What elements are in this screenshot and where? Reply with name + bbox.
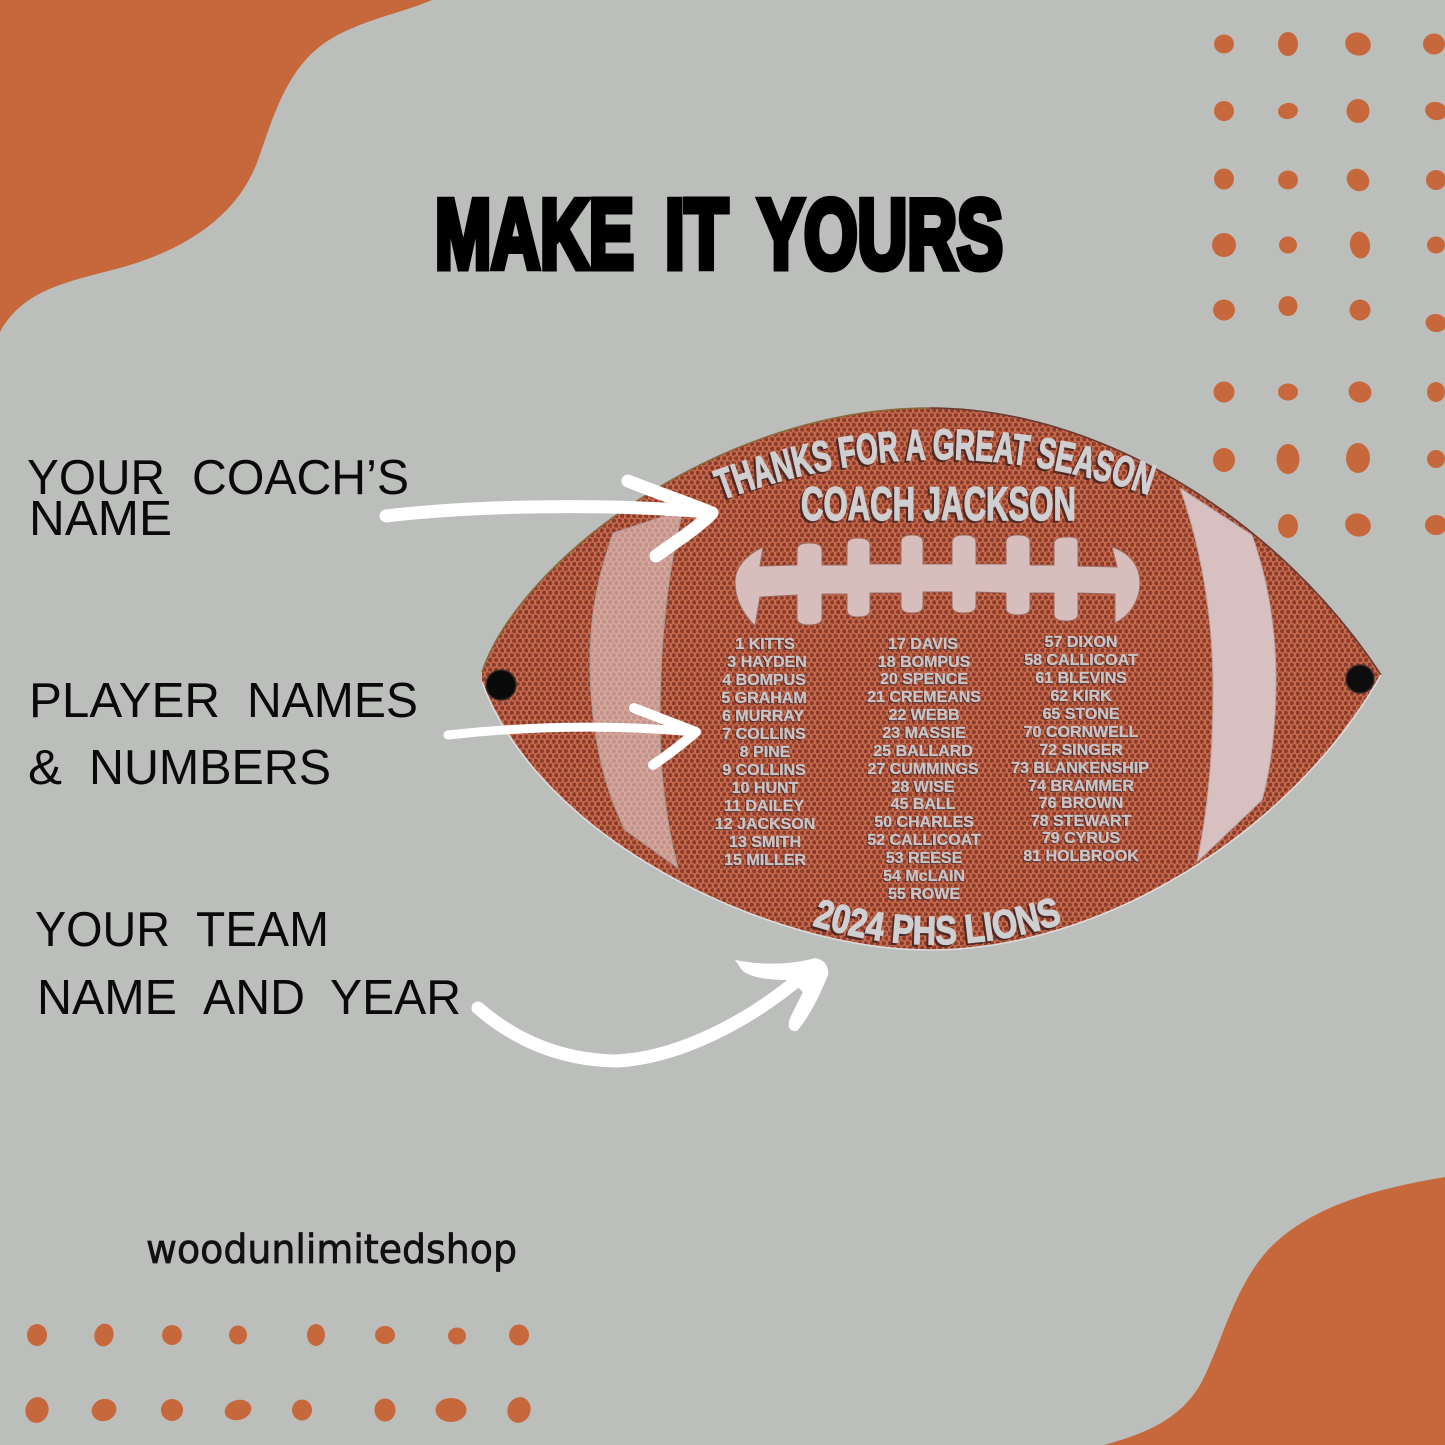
right stripe — [1180, 488, 1276, 862]
player list: column 3: 79 CYRUS — [1042, 830, 1120, 847]
label: your coach's name: NAME — [29, 492, 172, 546]
arrow: coach's name — [386, 481, 712, 556]
decorative dots: top right — [1212, 29, 1445, 540]
player list: column 2: 21 CREMEANS — [867, 689, 981, 706]
player list: column 1: 8 PINE — [740, 744, 791, 761]
player list: column 2 — [867, 636, 981, 903]
decorative dots: bottom left — [23, 1321, 534, 1426]
player list: column 2: 17 DAVIS — [888, 636, 958, 653]
team and year: 2024 PHS LIONS — [810, 898, 1060, 948]
player list: column 3: 62 KIRK — [1050, 688, 1112, 705]
title: YOURS — [758, 179, 1003, 289]
football body — [482, 408, 1381, 950]
coach name: COACH JACKSON — [801, 477, 1076, 530]
player list: column 3: 78 STEWART — [1031, 813, 1131, 830]
label: player names and numbers: NAMES — [247, 674, 418, 728]
player list: column 1: 3 HAYDEN — [727, 654, 807, 671]
screw: left — [486, 670, 516, 700]
player list: column 2: 45 BALL — [891, 796, 956, 813]
label: player names and numbers: & — [28, 741, 62, 795]
player list: column 3: 74 BRAMMER — [1028, 778, 1134, 795]
player list: column 3: 76 BROWN — [1039, 795, 1123, 812]
player list: column 1: 15 MILLER — [724, 852, 806, 869]
player list: column 1: 6 MURRAY — [722, 708, 804, 725]
title: MAKE — [435, 179, 634, 289]
player list: column 2: 52 CALLICOAT — [867, 832, 981, 849]
left stripe — [590, 510, 683, 868]
player list: column 1: 10 HUNT — [732, 780, 799, 797]
label: player names and numbers: NUMBERS — [89, 741, 331, 795]
player list: column 2: 54 McLAIN — [883, 868, 965, 885]
player list: column 2: 18 BOMPUS — [878, 654, 971, 671]
curved heading: THANKS FOR A GREAT SEASON — [710, 428, 1157, 500]
player list: column 1: 5 GRAHAM — [721, 690, 807, 707]
player list: column 2: 53 REESE — [886, 850, 963, 867]
player list: column 2: 55 ROWE — [888, 886, 960, 903]
player list: column 3: 65 STONE — [1042, 706, 1120, 723]
player list: column 1: 12 JACKSON — [715, 816, 815, 833]
label: your team name and year — [35, 903, 461, 1025]
player list: column 1: 11 DAILEY — [724, 798, 804, 815]
decorative blob: top left — [0, 0, 432, 332]
label: your team name and year: YEAR — [330, 971, 461, 1025]
player list: column 1: 9 COLLINS — [722, 762, 806, 779]
label: your coach's name: COACH’S — [192, 451, 409, 505]
label: your team name and year: TEAM — [196, 903, 329, 957]
player list: column 3: 72 SINGER — [1039, 742, 1123, 759]
player list: column 3: 73 BLANKENSHIP — [1011, 760, 1149, 777]
player list: column 3: 58 CALLICOAT — [1024, 652, 1138, 669]
player list: column 2: 20 SPENCE — [880, 671, 968, 688]
player list: column 2: 23 MASSIE — [882, 725, 966, 742]
player list: column 2: 50 CHARLES — [874, 814, 974, 831]
player list: column 2: 22 WEBB — [888, 707, 960, 724]
player list: column 1: 13 SMITH — [729, 834, 801, 851]
screw: right — [1346, 665, 1374, 693]
player list: column 3 — [1011, 634, 1149, 865]
label: your team name and year: YOUR — [35, 903, 170, 957]
player list: column 3: 61 BLEVINS — [1035, 670, 1127, 687]
decorative blob: bottom right — [1104, 1177, 1445, 1445]
arrow: team name and year — [478, 958, 828, 1061]
label: your coach's name: YOUR — [27, 451, 165, 505]
label: player names and numbers — [28, 674, 418, 795]
player list: column 3: 81 HOLBROOK — [1023, 848, 1139, 865]
title: IT — [665, 179, 728, 289]
player list: column 1: 1 KITTS — [735, 636, 795, 653]
player list: column 1 — [715, 636, 815, 869]
football plaque — [481, 407, 1382, 951]
label: your coach's name — [27, 451, 409, 546]
player list: column 2: 25 BALLARD — [873, 743, 973, 760]
label: player names and numbers: PLAYER — [29, 674, 220, 728]
shop name: woodunlimitedshop — [146, 1227, 517, 1273]
football rim — [482, 408, 1381, 950]
player list: column 3: 57 DIXON — [1045, 634, 1117, 651]
label: your team name and year: NAME — [37, 971, 177, 1025]
player list: column 1: 7 COLLINS — [722, 726, 806, 743]
player list: column 2: 27 CUMMINGS — [867, 761, 979, 778]
arrow: player names — [448, 708, 696, 765]
player list: column 2: 28 WISE — [891, 779, 955, 796]
player list: column 3: 70 CORNWELL — [1024, 724, 1139, 741]
title — [435, 179, 1003, 289]
laces — [735, 535, 1140, 626]
label: your team name and year: AND — [203, 971, 305, 1025]
player list: column 1: 4 BOMPUS — [722, 672, 806, 689]
